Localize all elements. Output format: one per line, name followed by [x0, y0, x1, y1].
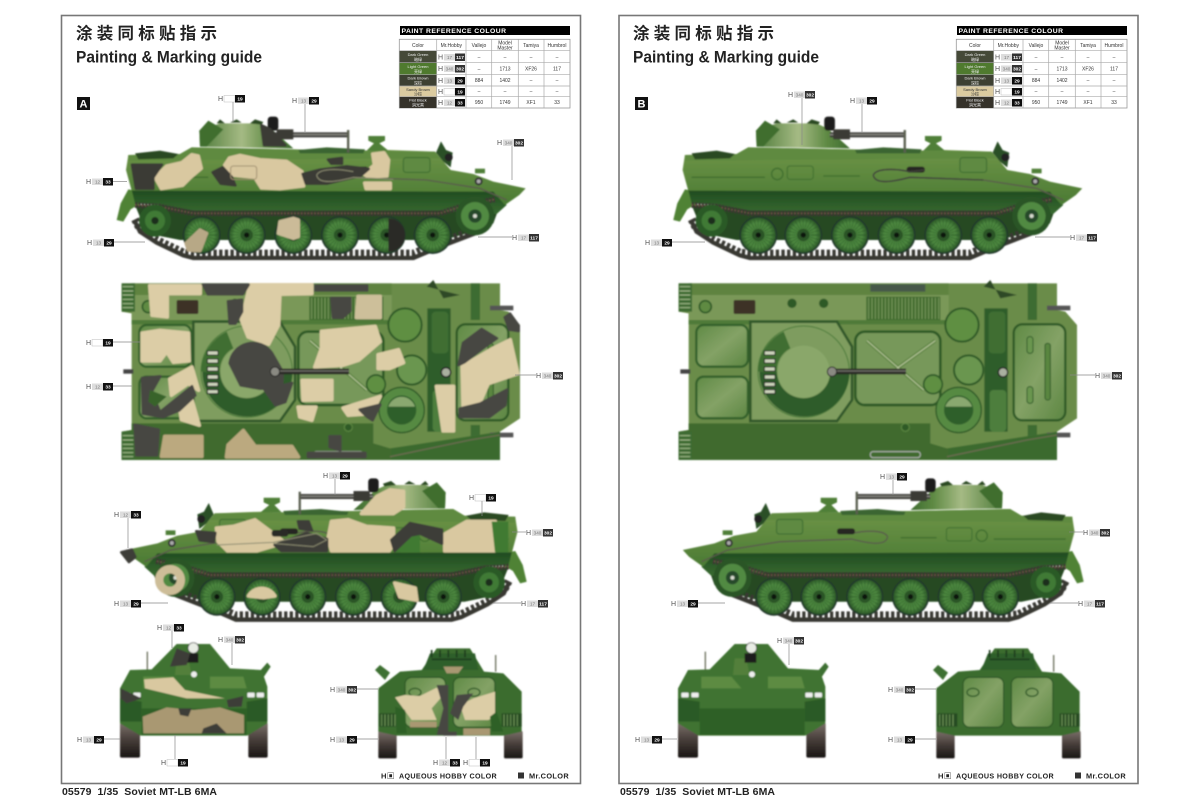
callout 33: [86, 178, 127, 186]
callout 29: H: [645, 240, 650, 247]
callout 29: 29: [133, 602, 139, 608]
callout 33: 33: [133, 513, 139, 519]
callout 302: H: [1095, 373, 1100, 380]
callout 19: H: [469, 495, 474, 502]
callout 29: [87, 239, 145, 247]
callout 29: 13: [301, 99, 306, 104]
callout 302: [330, 686, 378, 694]
callout 117: 117: [1088, 236, 1096, 242]
callout 29: 29: [654, 738, 660, 744]
callout 29: [850, 97, 877, 133]
callout 29: 13: [644, 738, 649, 743]
callout 19: H: [463, 760, 468, 767]
callout 302: 340: [338, 688, 346, 693]
callout 302: 302: [1113, 374, 1121, 380]
callout 117: 17: [521, 236, 526, 241]
callout 29: [635, 736, 677, 744]
callout 302: 340: [896, 688, 904, 693]
callout 302: 302: [515, 141, 523, 147]
callout 302: 340: [1103, 374, 1111, 379]
callout 19: 19: [488, 496, 494, 502]
callout 29: 29: [342, 474, 348, 480]
callout 19: H: [86, 340, 91, 347]
callout 29: [114, 600, 168, 608]
callout 19: 19: [180, 761, 186, 767]
panel: scheme A: [62, 16, 580, 784]
legend A: AQUEOUS HOBBY COLOR: [399, 772, 497, 780]
callout 33: H: [433, 760, 438, 767]
callout 302: [1070, 372, 1122, 380]
title B chinese: 涂装同标贴指示: [633, 23, 774, 43]
panel: scheme B: [619, 16, 1138, 784]
callout 29: 29: [106, 241, 112, 247]
callout 117: [493, 600, 548, 608]
callout 29: 13: [339, 738, 344, 743]
callout 302: H: [218, 637, 223, 644]
callout 33: 12: [95, 385, 100, 390]
legend A: [381, 772, 569, 780]
callout 33: 33: [105, 385, 111, 391]
callout 302: 340: [544, 374, 552, 379]
badge B: B: [638, 98, 646, 110]
callout 33: [86, 383, 132, 391]
callout 302: H: [526, 530, 531, 537]
title A english: Painting & Marking guide: [76, 48, 262, 66]
callout 302: 302: [906, 688, 914, 694]
callout 19: [161, 735, 188, 767]
callout 19: [86, 339, 140, 347]
callout 19: H: [161, 760, 166, 767]
callout 29: [330, 736, 378, 744]
callout 33: 33: [176, 626, 182, 632]
callout 117: 117: [530, 236, 538, 242]
callout 302: [218, 636, 245, 665]
paint reference table A: [399, 26, 570, 108]
callout 29: 29: [96, 738, 102, 744]
footer A: 05579 1/35 Soviet MT-LB 6MA: [62, 786, 217, 798]
callout 33: 33: [452, 761, 458, 767]
callout 117: H: [512, 235, 517, 242]
callout 33: 12: [123, 513, 128, 518]
callout 302: [888, 686, 936, 694]
callout 117: 117: [1096, 602, 1104, 608]
callout 33: H: [157, 625, 162, 632]
callout 302: H: [777, 638, 782, 645]
legend B: Mr.COLOR: [1086, 772, 1126, 780]
vehicle B front view: [678, 643, 829, 758]
callout 302: 340: [226, 638, 234, 643]
badge A: A: [80, 98, 88, 110]
callout 19: [218, 95, 245, 122]
vehicle A right side view: [121, 478, 527, 620]
callout 302: H: [888, 687, 893, 694]
callout 19: H: [218, 96, 223, 103]
callout 33: 12: [442, 761, 447, 766]
callout 29: 13: [96, 241, 101, 246]
panel frame B: [619, 16, 1138, 784]
callout 302: 302: [806, 93, 814, 99]
callout 29: H: [635, 737, 640, 744]
callout 117: H: [1070, 235, 1075, 242]
vehicle A top view: [122, 280, 520, 460]
callout 29: H: [888, 737, 893, 744]
vehicle B rear view: [933, 648, 1081, 758]
callout 29: 13: [654, 241, 659, 246]
callout 302: 302: [1101, 531, 1109, 537]
callout 29: H: [77, 737, 82, 744]
callout 29: [77, 736, 120, 744]
callout 302: 340: [505, 141, 513, 146]
callout 29: [323, 472, 350, 495]
callout 29: 13: [123, 602, 128, 607]
callout 19: [463, 737, 490, 767]
callout 29: H: [292, 98, 297, 105]
callout 302: 302: [544, 531, 552, 537]
callout 29: H: [671, 601, 676, 608]
callout 302: H: [536, 373, 541, 380]
callout 29: 29: [311, 99, 317, 105]
callout 117: 17: [1087, 602, 1092, 607]
callout 29: H: [330, 737, 335, 744]
callout 117: [1050, 600, 1105, 608]
callout 302: 302: [236, 638, 244, 644]
vehicle B right side view: [683, 478, 1084, 620]
callout 117: H: [521, 601, 526, 608]
callout 302: [1069, 529, 1110, 537]
callout 29: H: [323, 473, 328, 480]
callout 302: 340: [796, 93, 804, 98]
title A chinese: 涂装同标贴指示: [76, 23, 217, 43]
callout 29: 29: [869, 99, 875, 105]
callout 302: 340: [785, 639, 793, 644]
callout 117: [1035, 234, 1097, 242]
callout 29: 29: [899, 475, 905, 481]
badge A: [77, 97, 90, 110]
callout 19: 19: [237, 97, 243, 103]
callout 33: H: [86, 384, 91, 391]
callout 19: 19: [482, 761, 488, 767]
callout 33: [157, 624, 184, 648]
vehicle A rear view: [375, 648, 523, 758]
vehicle B left side view: [673, 117, 1082, 258]
callout 302: H: [1083, 530, 1088, 537]
legend A: H▣: [381, 772, 395, 780]
callout 33: H: [86, 179, 91, 186]
callout 302: [512, 529, 553, 537]
callout 29: H: [850, 98, 855, 105]
callout 33: 12: [95, 180, 100, 185]
callout 29: 13: [332, 474, 337, 479]
callout 302: 302: [795, 639, 803, 645]
vehicle B top view: [679, 280, 1077, 460]
callout 29: 29: [664, 241, 670, 247]
callout 29: 13: [897, 738, 902, 743]
title B english: Painting & Marking guide: [633, 48, 819, 66]
callout 302: [788, 91, 815, 145]
callout 302: [515, 372, 563, 380]
callout 302: H: [497, 140, 502, 147]
callout 302: H: [788, 92, 793, 99]
callout 29: [645, 239, 705, 247]
callout 33: H: [114, 512, 119, 519]
callout 29: [671, 600, 725, 608]
callout 29: [292, 97, 319, 132]
callout 302: [777, 637, 804, 665]
paint reference table B: [956, 26, 1127, 108]
callout 29: 29: [690, 602, 696, 608]
callout 302: 340: [534, 531, 542, 536]
callout 33: 33: [105, 180, 111, 186]
legend B: H▣: [938, 772, 952, 780]
vehicle A left side view: [117, 117, 526, 258]
callout 19: 19: [105, 341, 111, 347]
legend A: Mr.COLOR: [529, 772, 569, 780]
callout 33: 12: [166, 626, 171, 631]
callout 117: [478, 234, 539, 242]
callout 29: H: [880, 474, 885, 481]
callout 29: 13: [859, 99, 864, 104]
legend B: [938, 772, 1126, 780]
callout 302: H: [330, 687, 335, 694]
badge B: [635, 97, 648, 110]
legend B: AQUEOUS HOBBY COLOR: [956, 772, 1054, 780]
callout 117: 117: [539, 602, 547, 608]
callout 302: 302: [348, 688, 356, 694]
callout 117: 17: [530, 602, 535, 607]
callout 29: 29: [907, 738, 913, 744]
footer B: 05579 1/35 Soviet MT-LB 6MA: [620, 786, 775, 798]
callout 29: 13: [680, 602, 685, 607]
callout 29: 29: [349, 738, 355, 744]
callout 29: [880, 473, 907, 495]
callout 33: [433, 737, 460, 767]
callout 33: [114, 511, 141, 548]
callout 117: 17: [1079, 236, 1084, 241]
panel frame A: [62, 16, 580, 784]
callout 302: 302: [554, 374, 562, 380]
callout 302: 340: [1091, 531, 1099, 536]
callout 29: 13: [86, 738, 91, 743]
callout 117: H: [1078, 601, 1083, 608]
callout 19: [469, 494, 496, 516]
callout 29: H: [114, 601, 119, 608]
callout 302: [497, 139, 524, 180]
callout 29: [888, 736, 936, 744]
callout 29: H: [87, 240, 92, 247]
callout 29: 13: [889, 475, 894, 480]
vehicle A front view: [120, 643, 271, 758]
